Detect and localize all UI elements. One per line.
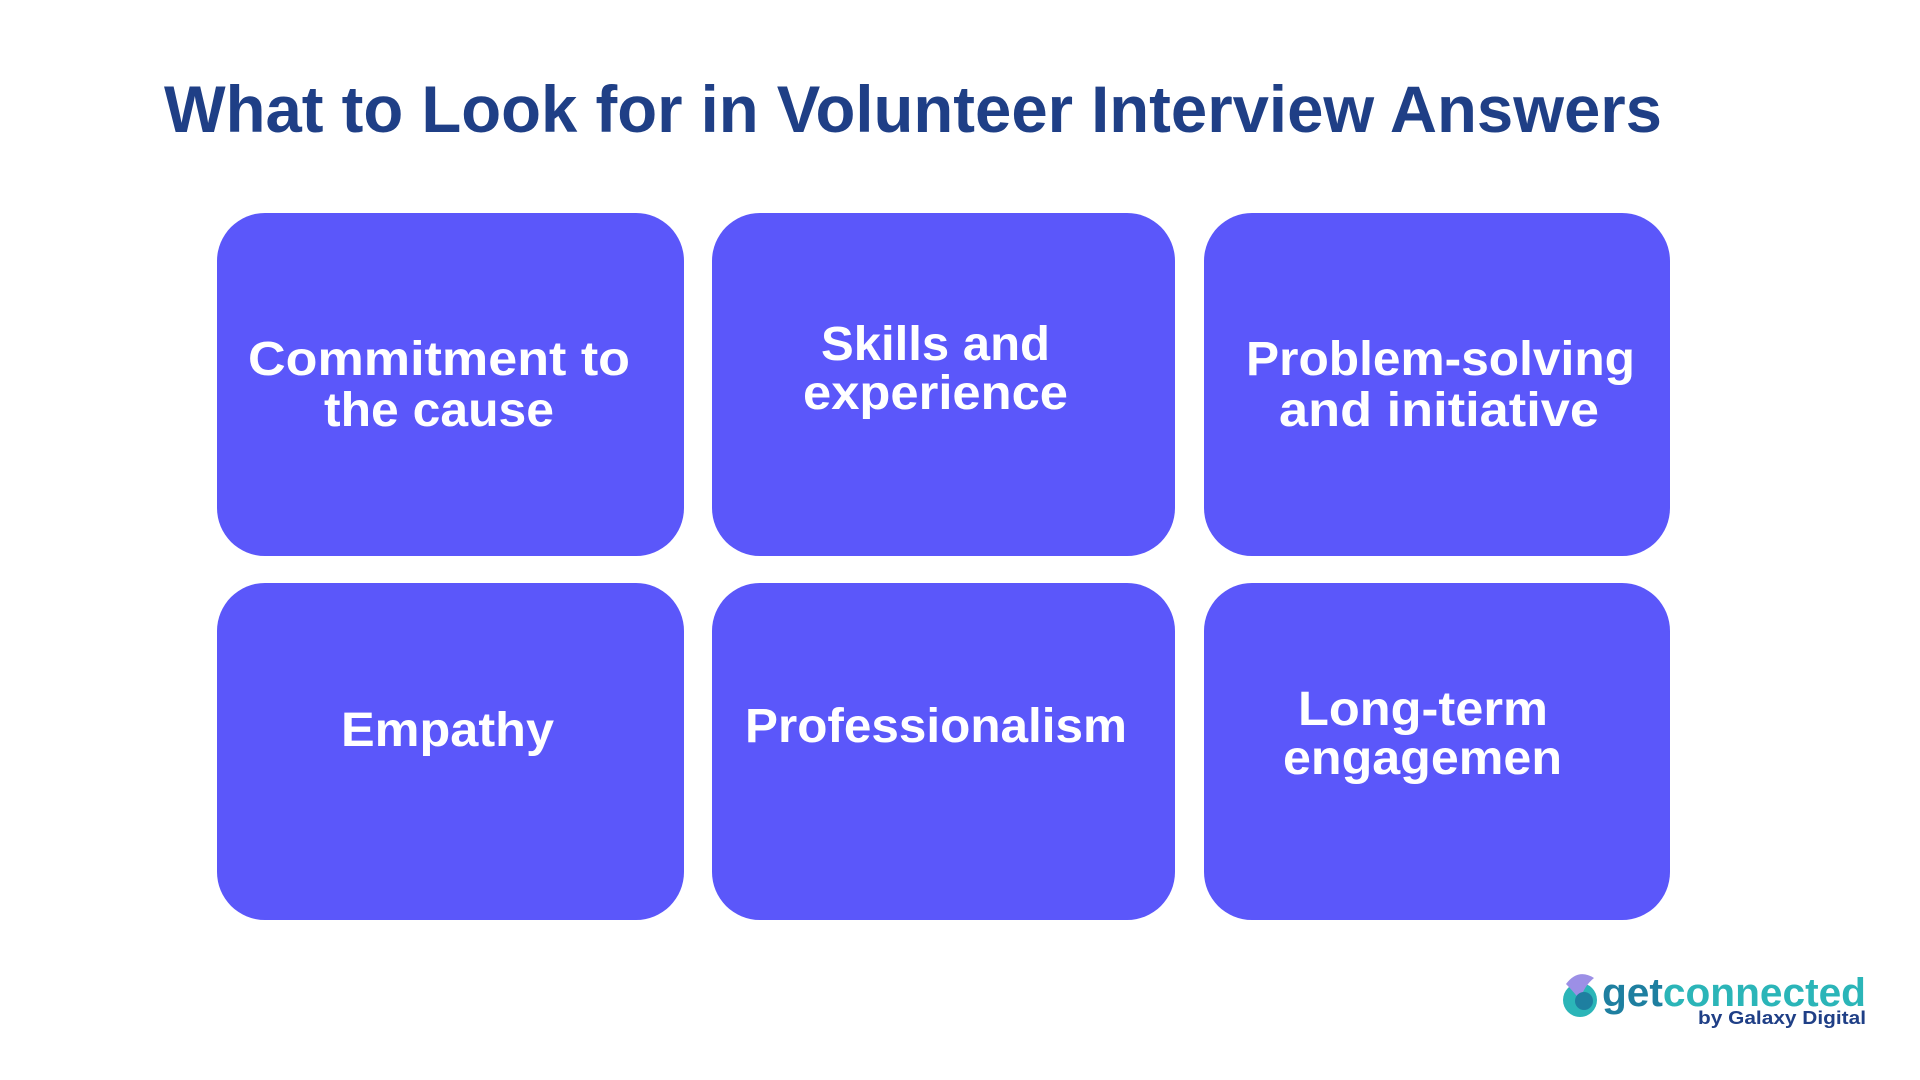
card: problem-solving: Problem-solving bbox=[1246, 333, 1635, 386]
logo: getconnected bbox=[1602, 971, 1866, 1015]
card: skills: experience bbox=[803, 367, 1068, 420]
card: long-term: Long-term bbox=[1298, 683, 1548, 736]
card: commitment bbox=[217, 213, 684, 556]
card: skills bbox=[712, 213, 1175, 556]
card: long-term: engagemen bbox=[1283, 732, 1562, 785]
icon: logo mark bbox=[1563, 974, 1597, 1017]
card: professionalism bbox=[712, 583, 1175, 920]
card: commitment: Commitment to bbox=[248, 333, 630, 386]
title: What to Look for in Volunteer Interview Answers bbox=[164, 72, 1662, 146]
card: commitment: the cause bbox=[324, 384, 554, 437]
card: empathy: Empathy bbox=[341, 704, 554, 757]
logo: by Galaxy Digital bbox=[1698, 1008, 1866, 1028]
card: empathy bbox=[217, 583, 684, 920]
card: professionalism: Professionalism bbox=[745, 700, 1127, 753]
card: long-term bbox=[1204, 583, 1670, 920]
card: problem-solving: and initiative bbox=[1279, 384, 1599, 437]
logo bbox=[1563, 971, 1866, 1028]
card: skills: Skills and bbox=[821, 318, 1050, 371]
card: problem-solving bbox=[1204, 213, 1670, 556]
